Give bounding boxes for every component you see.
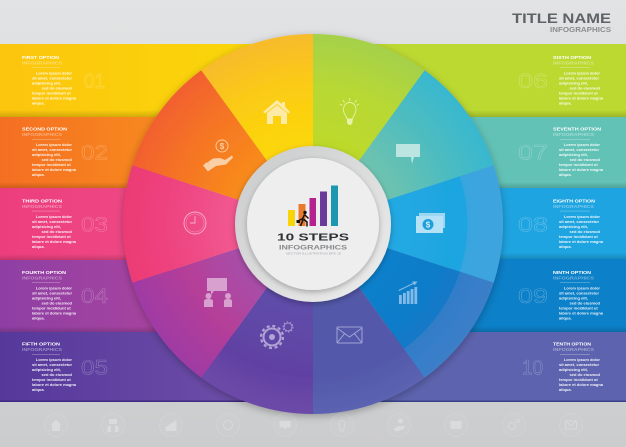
option 05 text: sed do eiusmod — [42, 372, 73, 377]
option 08 text: 08 — [518, 213, 548, 236]
option 08 text: aliqua. — [559, 244, 572, 249]
icon: speech bubble — [396, 144, 420, 164]
option 02 text: 02 — [81, 142, 108, 165]
option 05 text: 05 — [81, 356, 108, 380]
sector: violet — [201, 224, 313, 414]
sector: dark blue — [313, 224, 494, 378]
option 10 text: 10 — [522, 356, 543, 380]
icon: clock — [184, 212, 206, 234]
option 10 text: INFOGRAPHICS — [553, 347, 594, 352]
option 05 text: INFOGRAPHICS — [22, 347, 62, 352]
option 07 text: SEVENTH OPTION — [553, 127, 602, 132]
option 10 text: tempor incididunt ut — [559, 377, 598, 382]
option 05 text: labore et dolore magna — [32, 382, 77, 387]
sector: teal — [313, 70, 494, 224]
option 09 text: tempor incididunt ut — [559, 306, 598, 310]
option 09 text: sed do eiusmod — [570, 300, 601, 306]
option 04 text: sit amet, consectetur — [32, 290, 72, 296]
footer icon: speech — [274, 414, 296, 436]
option 07 text: aliqua. — [559, 172, 572, 177]
option 09 text: NINTH OPTION — [553, 270, 592, 275]
option 10 text: TENTH OPTION — [553, 342, 592, 346]
option 06 text: sit amet, consectetur — [559, 76, 599, 80]
icon: running businessman — [296, 211, 308, 226]
option 01 text: sed do eiusmod — [42, 86, 73, 90]
option 02 text: Lorem ipsum dolor — [36, 142, 72, 147]
option 07 text: sit amet, consectetur — [559, 147, 599, 152]
option 01 text: aliqua. — [32, 100, 45, 106]
bar chart logo — [288, 186, 338, 226]
title block — [512, 10, 611, 34]
option 08 text: sed do eiusmod — [570, 229, 601, 234]
bottom icon row — [44, 414, 582, 436]
option 03 text: Lorem ipsum dolor — [36, 214, 72, 219]
option 06 text: 06 — [518, 70, 548, 93]
option 05 text: FIFTH OPTION — [22, 342, 61, 346]
option 09 text: INFOGRAPHICS — [553, 276, 594, 280]
icon: house — [263, 100, 290, 124]
sector: magenta — [132, 224, 313, 378]
option 06 text: INFOGRAPHICS — [553, 60, 594, 66]
option 06 text: aliqua. — [559, 100, 572, 106]
option 10 text: Lorem ipsum dolor — [564, 357, 600, 362]
option 02 text: tempor incididunt ut — [32, 162, 71, 167]
sector: pink — [123, 165, 313, 283]
option 10 text: labore et dolore magna — [559, 382, 604, 387]
footer icon: envelope — [560, 414, 582, 436]
left band: violet — [0, 332, 260, 402]
option 03 text: adipisicing elit, — [32, 224, 61, 229]
option 02 text — [22, 127, 108, 177]
option 01 text: adipisicing elit, — [32, 80, 61, 86]
option 08 text: EIGHTH OPTION — [553, 198, 596, 203]
option 04 text: labore et dolore magna — [32, 310, 77, 316]
option 04 text: INFOGRAPHICS — [22, 276, 62, 280]
icon: hand with dollar coin: $ — [220, 142, 225, 151]
center subtitle: INFOGRAPHICS — [279, 244, 348, 252]
option 03 text: aliqua. — [32, 244, 45, 249]
option 07 text: sed do eiusmod — [570, 157, 601, 162]
option 05 text: sit amet, consectetur — [32, 362, 72, 367]
option 09 text: adipisicing elit, — [559, 296, 588, 300]
option 06 text: sed do eiusmod — [570, 86, 601, 90]
footer icon: people — [102, 414, 124, 436]
icon: light bulb — [340, 98, 359, 125]
option 10 text: adipisicing elit, — [559, 367, 588, 372]
footer icon: hand — [388, 414, 410, 436]
option 05 text — [22, 342, 108, 392]
right band: indigo — [370, 332, 626, 402]
center small caption: VECTOR ILLUSTRATION EPS 10 — [286, 252, 342, 256]
option 09 text: aliqua. — [559, 316, 572, 320]
option 06 text: Lorem ipsum dolor — [564, 70, 600, 76]
option 07 text: Lorem ipsum dolor — [564, 142, 600, 147]
option 08 text: adipisicing elit, — [559, 224, 588, 229]
option 01 text: tempor incididunt ut — [32, 90, 71, 96]
option 05 text: tempor incididunt ut — [32, 377, 71, 382]
center title: 10 STEPS — [277, 232, 349, 244]
left band: yellow — [0, 44, 260, 117]
option 01 text: 01 — [84, 70, 105, 93]
option 04 text: tempor incididunt ut — [32, 306, 71, 310]
option 03 text: sit amet, consectetur — [32, 219, 72, 224]
option 09 text: sit amet, consectetur — [559, 290, 599, 296]
sector: orange — [132, 70, 313, 224]
footer icon: chart — [160, 414, 182, 436]
option 05 text: Lorem ipsum dolor — [36, 357, 72, 362]
center hub — [235, 146, 391, 302]
option 09 text: labore et dolore magna — [559, 310, 604, 316]
option 04 text: 04 — [81, 285, 108, 308]
option 07 text: tempor incididunt ut — [559, 162, 598, 167]
footer icon: money — [444, 414, 468, 436]
option 05 text: aliqua. — [32, 387, 45, 392]
option 03 text: tempor incididunt ut — [32, 234, 71, 239]
option 10 text: sit amet, consectetur — [559, 362, 599, 367]
option 04 text: adipisicing elit, — [32, 296, 61, 300]
right band: green — [370, 44, 626, 117]
option 01 text: sit amet, consectetur — [32, 76, 72, 80]
icon: banknotes: $ — [426, 220, 431, 230]
option 08 text: sit amet, consectetur — [559, 219, 599, 224]
option 02 text: INFOGRAPHICS — [22, 132, 62, 137]
option 04 text: FOURTH OPTION — [22, 270, 67, 275]
option 02 text: SECOND OPTION — [22, 127, 68, 132]
option 04 text: sed do eiusmod — [42, 300, 73, 306]
option 06 text: SIXTH OPTION — [553, 55, 592, 60]
sector: green — [313, 34, 425, 224]
icon: hand with dollar coin — [203, 140, 233, 172]
option 09 text — [518, 270, 604, 320]
option 01 text: INFOGRAPHICS — [22, 60, 62, 66]
option 05 text: adipisicing elit, — [32, 367, 61, 372]
option 02 text: labore et dolore magna — [32, 167, 77, 172]
right band: dark blue — [450, 259, 626, 332]
option 03 text: sed do eiusmod — [42, 229, 73, 234]
left band: pink — [0, 188, 160, 260]
title block: INFOGRAPHICS — [550, 27, 611, 34]
option 01 text — [22, 55, 105, 106]
option 02 text: adipisicing elit, — [32, 152, 61, 157]
icon: banknotes — [416, 213, 445, 233]
option 03 text: 03 — [81, 213, 108, 236]
option 01 text: FIRST OPTION — [22, 55, 60, 60]
option 09 text: 09 — [518, 285, 548, 308]
icon: envelope — [337, 327, 362, 343]
icon: growth chart — [398, 282, 418, 304]
footer icon: gear — [502, 414, 526, 436]
option 09 text: Lorem ipsum dolor — [564, 286, 600, 290]
icon: gears — [261, 322, 293, 348]
sector: blue — [313, 165, 503, 283]
right band: teal — [450, 117, 626, 188]
option 10 text — [522, 342, 604, 392]
option 08 text: Lorem ipsum dolor — [564, 214, 600, 219]
cycle wheel — [123, 34, 503, 414]
option 06 text: tempor incididunt ut — [559, 90, 598, 96]
option 06 text — [518, 55, 604, 106]
option 04 text — [22, 270, 108, 320]
left band: orange — [0, 117, 180, 188]
footer icon: clock — [216, 414, 240, 436]
left band: purple — [0, 260, 170, 332]
option 01 text: labore et dolore magna — [32, 96, 77, 100]
icon: two people with speech bubble — [204, 278, 232, 307]
option 07 text: 07 — [518, 142, 548, 165]
option 08 text: INFOGRAPHICS — [553, 204, 594, 209]
right band: blue — [470, 188, 626, 259]
title block: TITLE NAME — [512, 10, 611, 26]
option 03 text: labore et dolore magna — [32, 239, 77, 244]
option 07 text: adipisicing elit, — [559, 152, 588, 157]
footer icon: home — [44, 414, 68, 436]
option 10 text: aliqua. — [559, 387, 572, 392]
option 07 text — [518, 127, 604, 177]
option 03 text — [22, 198, 108, 249]
option 02 text: aliqua. — [32, 172, 45, 177]
option 06 text: labore et dolore magna — [559, 96, 604, 100]
sector: indigo — [313, 224, 425, 414]
option 02 text: sit amet, consectetur — [32, 147, 72, 152]
option 06 text: adipisicing elit, — [559, 80, 588, 86]
option 01 text: Lorem ipsum dolor — [36, 70, 72, 76]
footer icon: bulb — [330, 414, 354, 436]
option 02 text: sed do eiusmod — [42, 157, 73, 162]
sector: yellow — [201, 34, 313, 224]
option 03 text: INFOGRAPHICS — [22, 204, 62, 209]
option 04 text: aliqua. — [32, 316, 45, 320]
option 10 text: sed do eiusmod — [570, 372, 601, 377]
option 04 text: Lorem ipsum dolor — [36, 286, 72, 290]
option 08 text — [518, 198, 604, 249]
option 03 text: THIRD OPTION — [22, 198, 63, 203]
option 07 text: labore et dolore magna — [559, 167, 604, 172]
option 07 text: INFOGRAPHICS — [553, 132, 594, 137]
option 08 text: labore et dolore magna — [559, 239, 604, 244]
option 08 text: tempor incididunt ut — [559, 234, 598, 239]
